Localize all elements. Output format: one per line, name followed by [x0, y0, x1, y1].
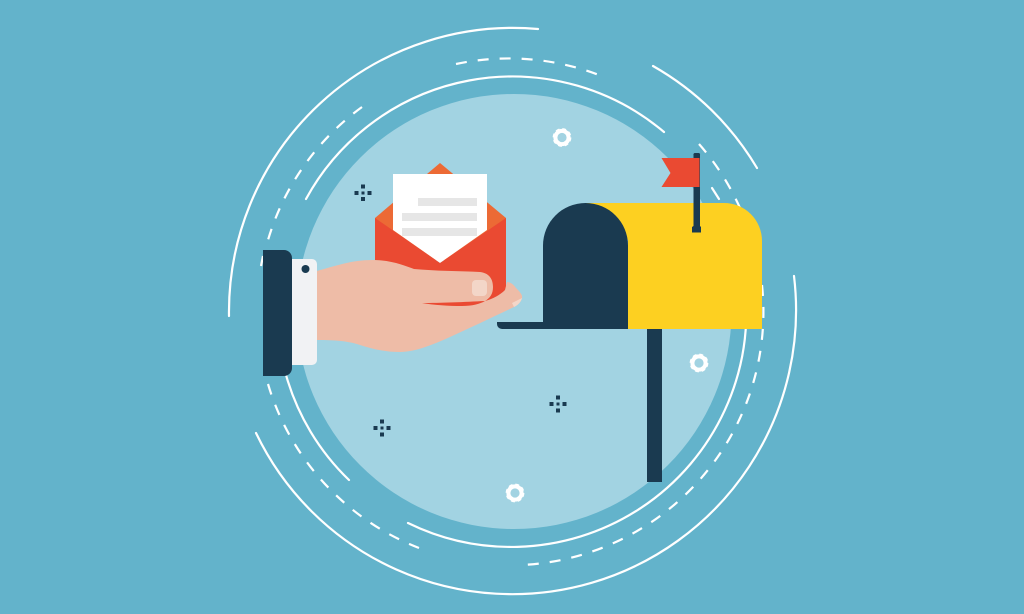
gear icon bottom	[507, 485, 523, 501]
dot cross icon top left	[354, 184, 372, 201]
cuff button	[302, 265, 310, 273]
envelope with letter	[375, 163, 506, 303]
jacket sleeve	[263, 250, 292, 376]
mailbox tray	[497, 322, 545, 329]
mailbox post	[647, 329, 662, 482]
light circle backdrop	[296, 94, 732, 529]
gear icon top	[554, 129, 570, 146]
shirt cuff	[292, 259, 317, 365]
mailbox body	[585, 203, 762, 329]
envelope front	[375, 218, 506, 303]
thumb nail	[472, 280, 487, 296]
finger nail	[512, 298, 522, 307]
mailbox	[497, 153, 762, 482]
gear icon right	[691, 355, 707, 371]
letter	[393, 174, 487, 263]
sleeve and hand	[263, 250, 522, 376]
flag pole	[692, 153, 701, 232]
letter lines	[402, 198, 477, 236]
mailbox door	[543, 203, 628, 329]
hand	[317, 260, 522, 352]
envelope back flap	[375, 163, 506, 260]
envelope sliver under thumb	[422, 301, 485, 306]
dot cross icon bottom left	[374, 420, 390, 436]
dashed ring arcs	[261, 58, 763, 565]
flag	[662, 158, 700, 187]
dot cross icon center	[550, 396, 566, 412]
inner ring arcs	[286, 76, 746, 547]
outer ring arcs	[229, 28, 796, 594]
